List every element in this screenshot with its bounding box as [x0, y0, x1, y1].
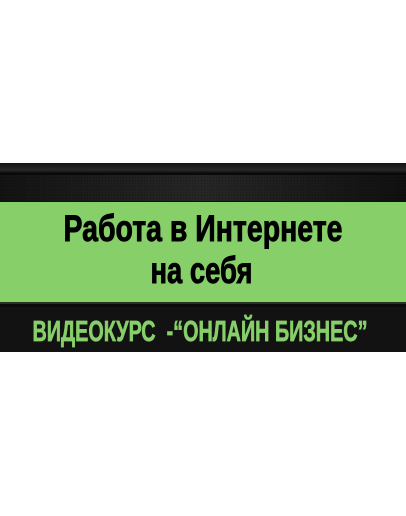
panel: bottom dark band: [0, 302, 406, 352]
heading: title: на себя: [150, 250, 252, 291]
heading: title: [64, 208, 342, 291]
panel: green title band: [0, 202, 406, 302]
panel: top dark carbon strip: [0, 163, 406, 202]
